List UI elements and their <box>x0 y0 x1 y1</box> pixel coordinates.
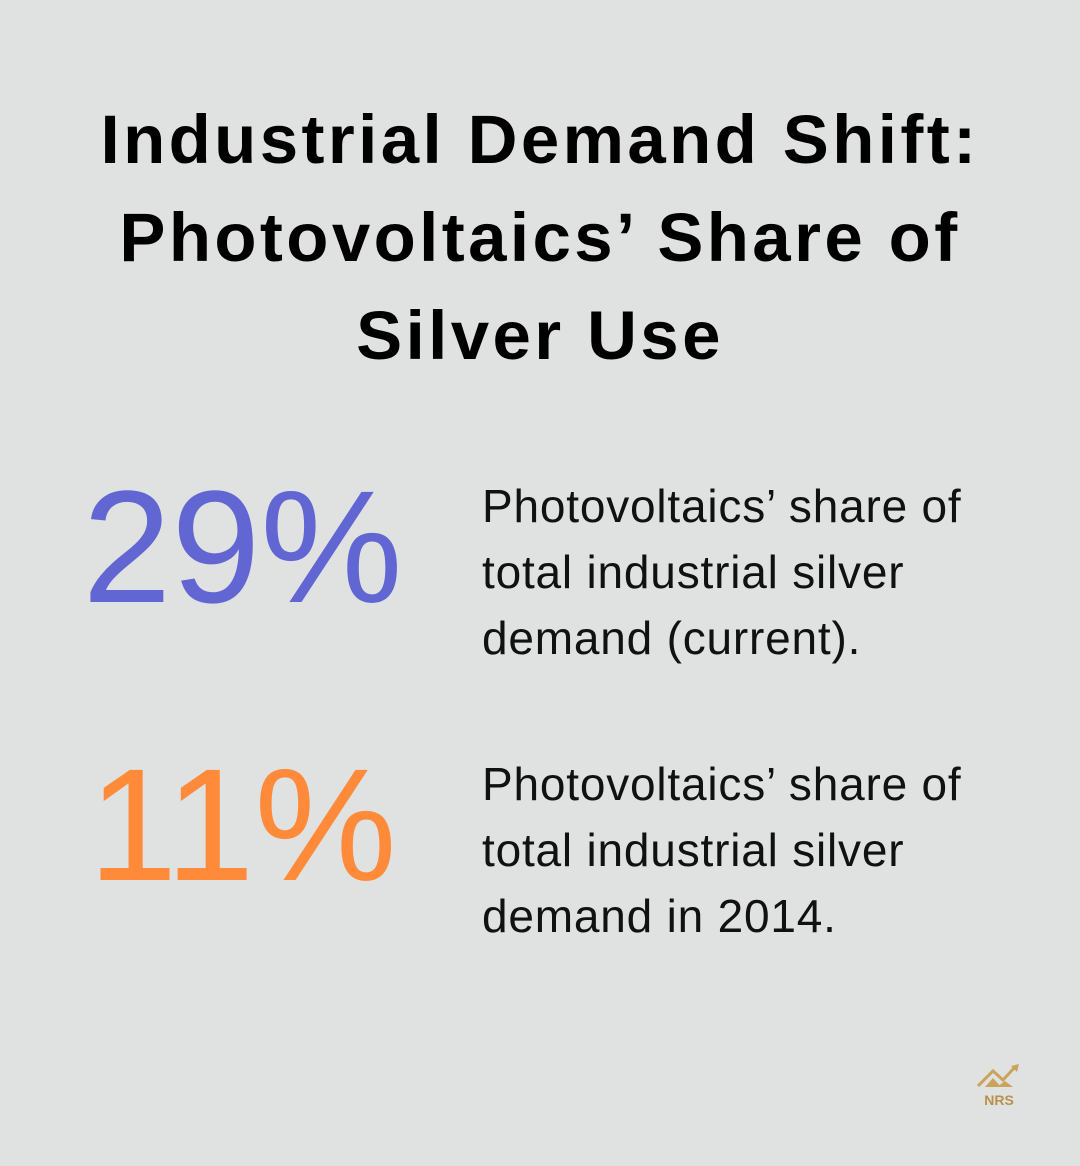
text: 29% description <box>482 480 962 664</box>
text: 11% description: Photovoltaics’ share of <box>482 758 962 810</box>
text: 11% description: demand in 2014. <box>482 890 837 942</box>
text: 29% description: demand (current). <box>482 612 861 664</box>
title: Industrial Demand Shift: <box>100 101 979 178</box>
title: Photovoltaics’ Share of <box>119 199 961 276</box>
logo: NRS <box>977 1064 1019 1108</box>
stat: 11%: 11% <box>88 735 397 914</box>
stat: 29%: 29% <box>82 457 403 636</box>
text: 29% description: Photovoltaics’ share of <box>482 480 962 532</box>
title <box>100 101 979 374</box>
text: 11% description <box>482 758 962 942</box>
title: Silver Use <box>356 297 724 374</box>
text: 11% description: total industrial silver <box>482 824 904 876</box>
logo: NRS: NRS <box>984 1092 1014 1108</box>
text: 29% description: total industrial silver <box>482 546 904 598</box>
